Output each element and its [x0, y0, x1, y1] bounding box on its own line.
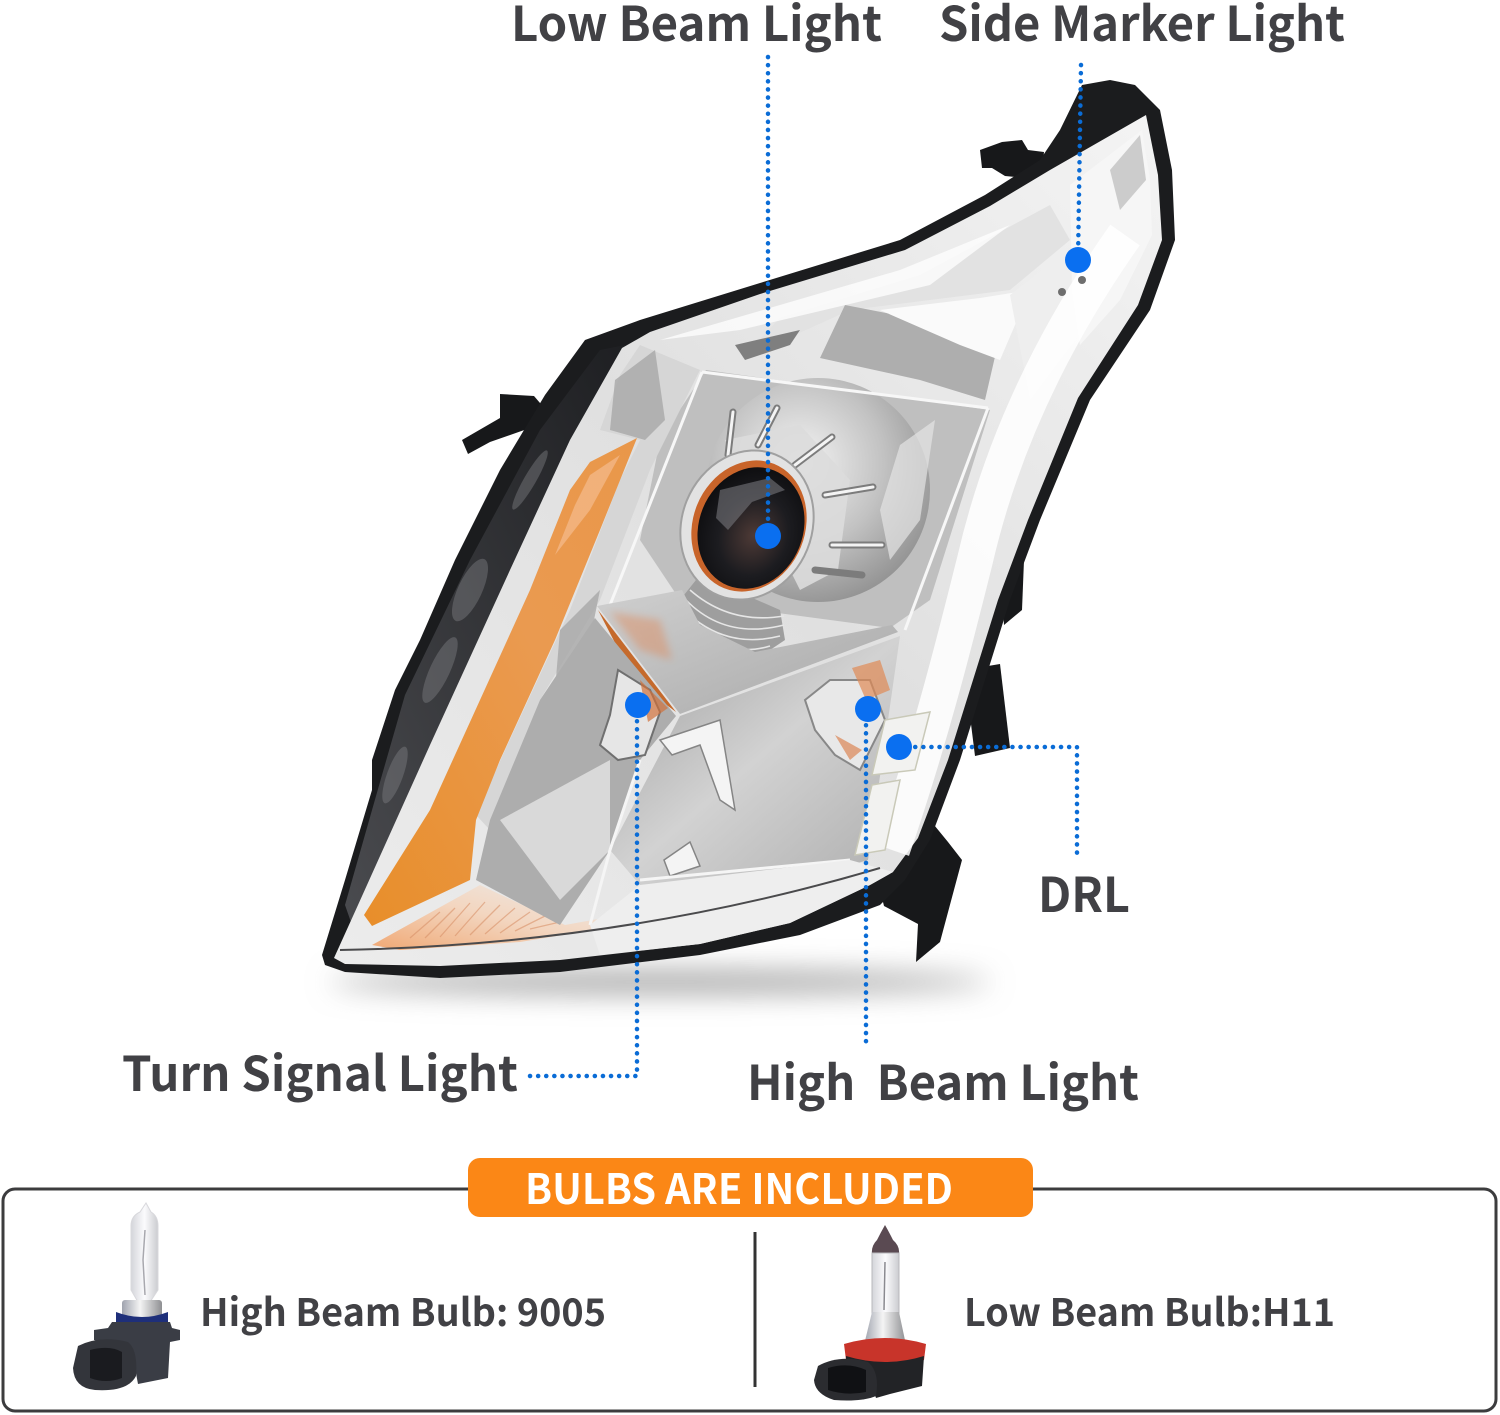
projector fins: [728, 408, 882, 575]
high beam leader: [864, 709, 868, 1043]
top-right reflector panels: [660, 130, 1152, 400]
fin highlights: [728, 408, 882, 545]
label: DRL: DRL: [1038, 856, 1130, 926]
label: high beam light: High Beam Light: [747, 1044, 1139, 1114]
corner fan reflector: [372, 885, 625, 950]
left clear reflector column: [476, 345, 700, 830]
DRL lens blocks: [855, 712, 930, 855]
panel: bulbs included: [3, 1156, 1496, 1411]
glass reflection: [716, 478, 785, 530]
panel frames: [610, 372, 988, 630]
marker dots: [625, 247, 1091, 760]
housing highlights: [377, 448, 552, 806]
bottom chrome trim: [590, 860, 893, 955]
shield edge: [598, 610, 676, 712]
side marker detail: [1058, 276, 1086, 296]
icon: H11 bulb: [814, 1225, 926, 1400]
silver shield: [597, 590, 898, 714]
lower left reflector: [476, 618, 676, 925]
threaded collar: [680, 575, 785, 660]
ground shadow: [330, 971, 990, 993]
side housing, smoked: [345, 345, 625, 925]
leader lines and markers: [523, 57, 1091, 1076]
left chrome fins: [555, 350, 665, 690]
lower black trim: [340, 868, 880, 950]
sphere highlights: [880, 420, 935, 560]
DRL leader: [899, 747, 1077, 860]
projector glass: [680, 451, 822, 605]
black housing outline: [322, 80, 1175, 978]
high beam socket: [805, 660, 890, 770]
clear lens body: [334, 115, 1162, 966]
orange shield reflection: [610, 612, 672, 660]
headlight assembly: [322, 80, 1175, 993]
divider: [754, 1232, 756, 1387]
panel frame: [3, 1189, 1496, 1411]
turn signal leader: [523, 705, 637, 1076]
label: turn signal light: Turn Signal Light: [122, 1035, 518, 1105]
low beam leader: [766, 57, 770, 536]
amber reflector: [364, 438, 637, 926]
amber highlight: [555, 455, 620, 555]
sphere behind projector: [706, 378, 930, 602]
label: low beam bulb: Low Beam Bulb:H11: [964, 1282, 1335, 1337]
turn signal socket: [600, 670, 668, 760]
badge: BULBS ARE INCLUDED: [525, 1156, 953, 1217]
projector chrome ring: [658, 430, 836, 620]
label: high beam bulb: High Beam Bulb: 9005: [200, 1282, 606, 1337]
orange ring: [672, 443, 826, 609]
fin shroud: [725, 425, 850, 590]
mounting brackets: [462, 140, 1044, 962]
DRL light bar: [892, 235, 1125, 850]
side marker leader: [1078, 65, 1081, 260]
icon: 9005 bulb: [73, 1203, 180, 1390]
lower reflector: [610, 636, 900, 885]
center ribs: [660, 720, 735, 876]
lower frame: [590, 760, 850, 925]
reflector bowl: [640, 370, 990, 628]
light wedge: [500, 760, 610, 900]
